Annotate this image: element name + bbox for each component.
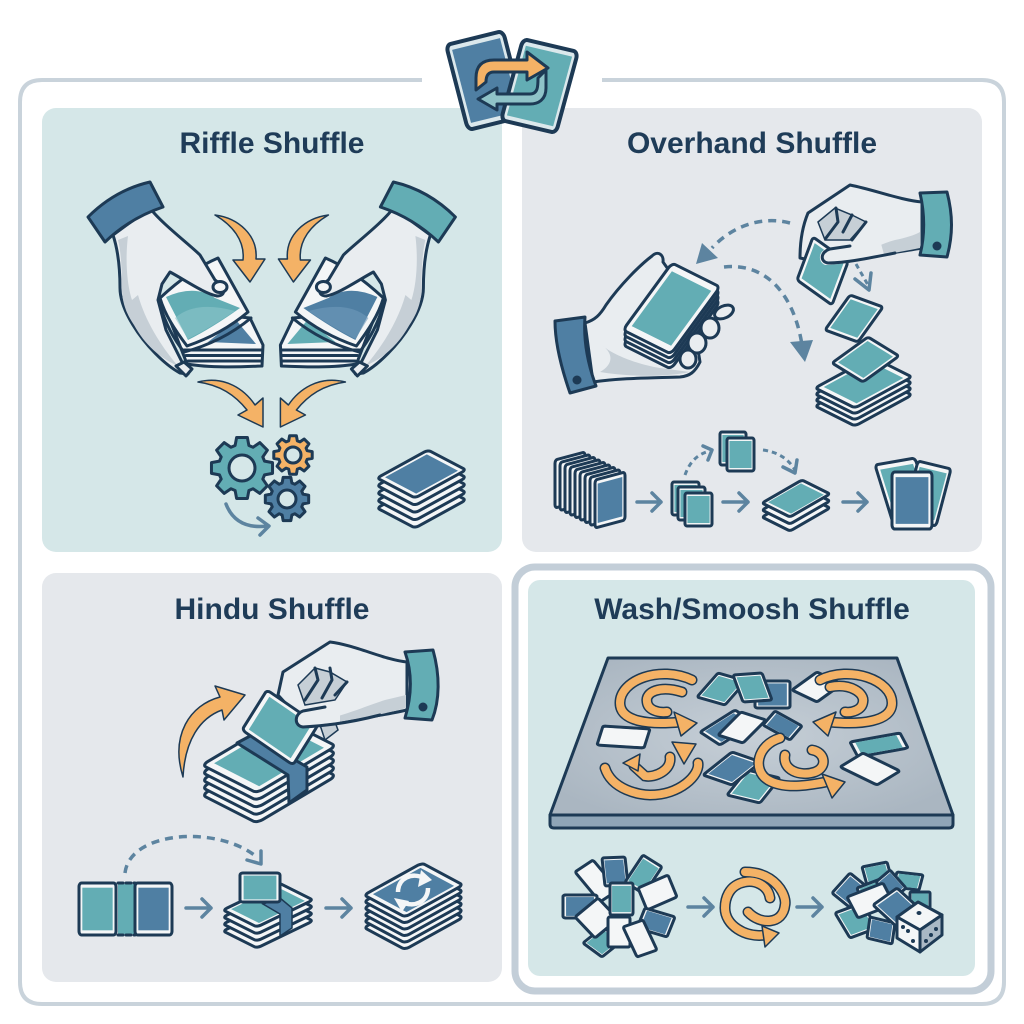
cards bbox=[597, 672, 908, 803]
arrow: small dashed drop bbox=[855, 264, 871, 290]
icon: gears bbox=[211, 436, 312, 535]
icon: stack with top card bbox=[223, 873, 313, 948]
arrow: dashed arc bbox=[125, 837, 261, 873]
icon: two lifted cards bbox=[720, 432, 754, 471]
icon: orange spiral bbox=[725, 872, 785, 947]
icon: small stack bbox=[762, 480, 830, 531]
arrow bbox=[797, 898, 822, 916]
swirl arrow: bottom right bbox=[759, 738, 845, 798]
illustration: left hand holding deck bbox=[555, 253, 736, 393]
arrow: lower right orange bbox=[280, 380, 345, 427]
illustration: right hand holding deck bbox=[280, 182, 455, 376]
icon: fanned cards bbox=[875, 458, 951, 529]
icon: result stack with cycle bbox=[364, 863, 463, 950]
icon: split deck bbox=[79, 883, 172, 935]
heading: overhand shuffle: Overhand Shuffle bbox=[627, 127, 877, 160]
illustration: hand lifting card bbox=[242, 642, 438, 765]
arrow bbox=[723, 493, 748, 511]
arrow bbox=[843, 493, 867, 511]
icon: finished deck stack bbox=[377, 450, 466, 528]
heading: riffle shuffle: Riffle Shuffle bbox=[180, 127, 364, 160]
heading: wash smoosh shuffle: Wash/Smoosh Shuffle bbox=[594, 593, 910, 626]
icon: shuffled pile with die bbox=[832, 862, 942, 952]
panel: wash smoosh shuffle bbox=[515, 567, 991, 991]
arrow: dashed arc to left hand bbox=[696, 221, 790, 264]
arrow: dashed down bbox=[763, 450, 797, 473]
illustration: right hand dropping card bbox=[797, 185, 952, 305]
flow: vertical deck to fanned cards bbox=[555, 432, 951, 531]
icon: upright deck bbox=[555, 452, 625, 528]
icon: top swap cards bbox=[446, 31, 578, 133]
arrow bbox=[186, 899, 211, 917]
arrow bbox=[688, 898, 713, 916]
arrow bbox=[637, 493, 661, 511]
illustration: falling cards onto stack bbox=[815, 295, 912, 426]
arrow: lower left orange bbox=[198, 380, 263, 427]
heading: hindu shuffle: Hindu Shuffle bbox=[175, 593, 369, 626]
icon: scattered card pile bbox=[563, 855, 677, 957]
arrow bbox=[326, 899, 351, 917]
flow: split, top card, result bbox=[79, 837, 463, 950]
swirl arrow: top left bbox=[620, 674, 697, 736]
illustration: stack with band bbox=[202, 718, 336, 823]
illustration: table with scattered cards bbox=[550, 658, 953, 828]
arrow: dashed up bbox=[685, 446, 712, 475]
swirl arrow: bottom left bbox=[605, 742, 698, 795]
arrow: orange lift bbox=[179, 686, 245, 777]
illustration: left hand holding deck bbox=[88, 182, 263, 376]
panel: overhand shuffle bbox=[522, 108, 982, 552]
arrow: top right orange bbox=[278, 215, 328, 282]
swirl arrow: top right bbox=[813, 674, 892, 736]
arrow: top left orange bbox=[215, 215, 265, 282]
panel: riffle shuffle bbox=[42, 108, 502, 552]
panel: hindu shuffle bbox=[42, 573, 502, 982]
icon: three small cards bbox=[672, 482, 712, 526]
arrow: dashed arc to stack bbox=[724, 267, 813, 362]
